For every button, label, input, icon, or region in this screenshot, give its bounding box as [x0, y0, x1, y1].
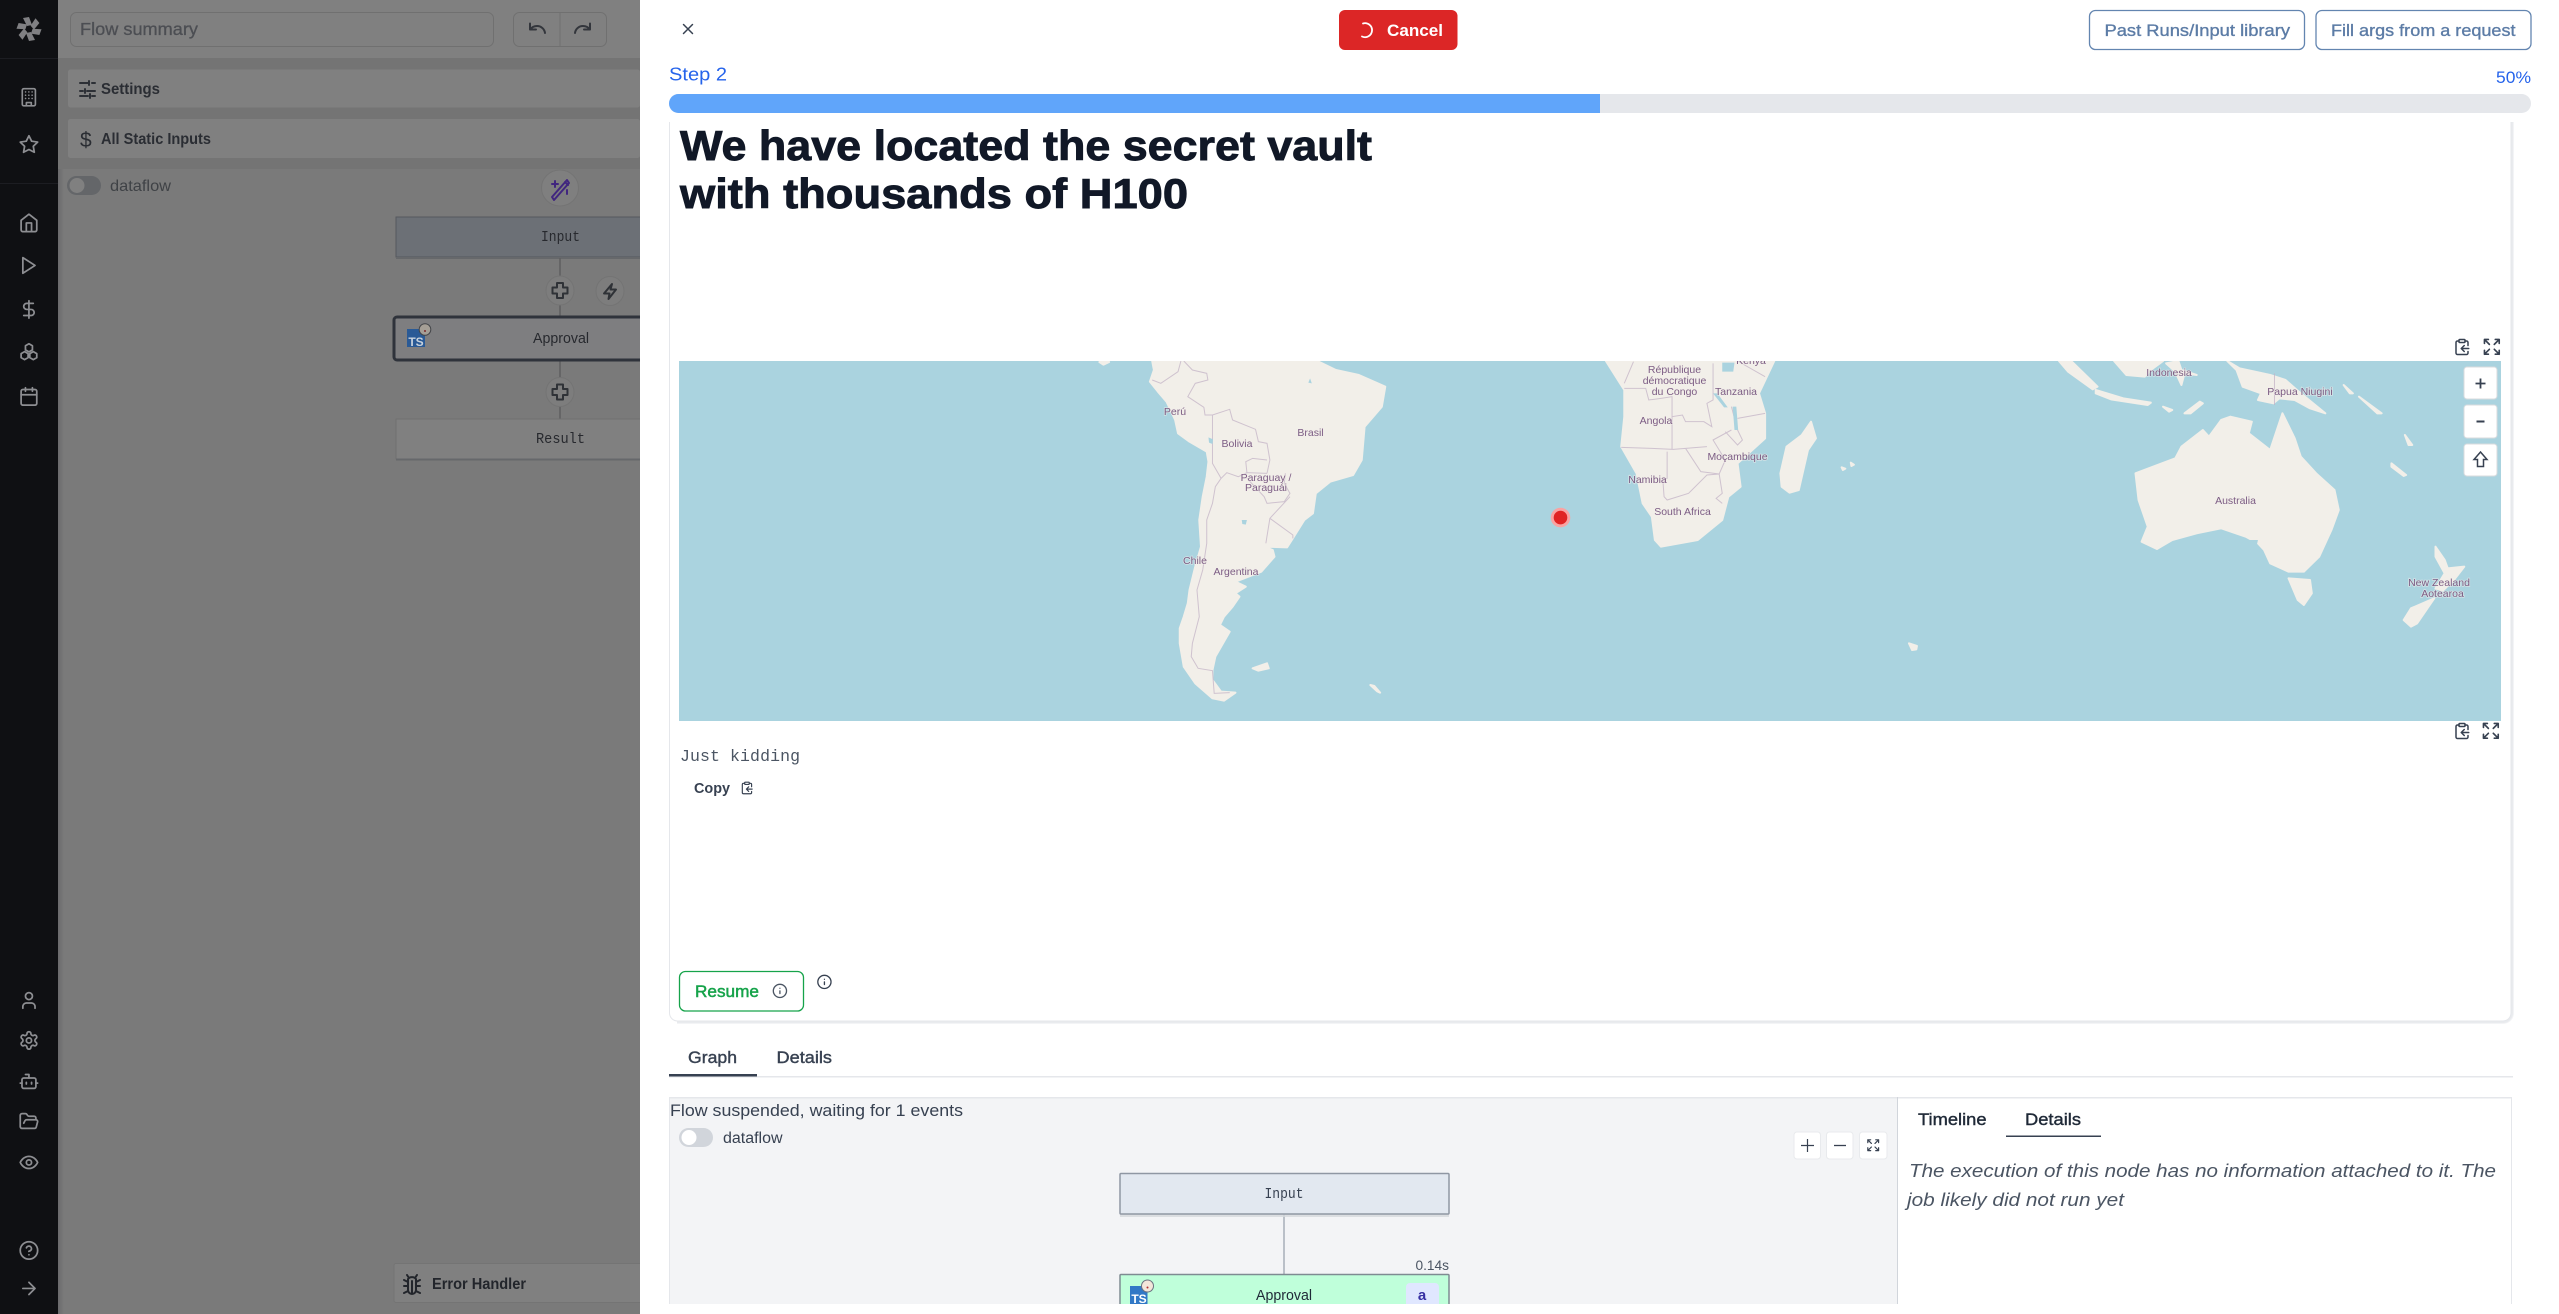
button: copy: Copy [694, 781, 730, 797]
map labels: Moçambique [1707, 451, 1768, 463]
map labels: Bolivia [1222, 438, 1253, 450]
icon: star [20, 136, 38, 152]
icon: logo [16, 17, 42, 41]
tabs: timeline and details: Timeline [1918, 1110, 1986, 1129]
map labels: Indonesia [2146, 367, 2192, 379]
icon: dollar [24, 301, 34, 318]
map labels: République [1648, 364, 1701, 376]
icon: calendar [21, 388, 37, 405]
map labels: du Congo [1652, 386, 1697, 398]
icon: copy map bottom [2456, 724, 2469, 738]
progress bar [669, 94, 2531, 113]
button: fill args: Fill args from a request [2331, 21, 2516, 40]
icon: folder [20, 1114, 38, 1128]
map labels: South Africa [1654, 506, 1711, 518]
icon: bot [20, 1074, 38, 1088]
input: flow summary: Flow summary [80, 19, 198, 39]
button: cancel: Cancel [1387, 21, 1443, 40]
row: error handler [403, 1274, 526, 1295]
input: flow summary [70, 12, 494, 46]
node: input [1120, 1174, 1449, 1217]
button: cancel [1339, 10, 1458, 50]
tabs: graph and details: Graph [688, 1048, 737, 1067]
button: past runs [2090, 10, 2304, 50]
icon: boxes [21, 344, 37, 360]
node: approval [1119, 1274, 1450, 1304]
map labels: Argentina [1214, 566, 1259, 578]
node: approval: TS [1131, 1292, 1147, 1306]
node: approval: Approval [533, 330, 589, 347]
map labels [1164, 355, 2470, 600]
icon: play [23, 258, 35, 273]
row: settings: Settings [101, 81, 160, 98]
label: step: Step 2 [669, 64, 727, 84]
map labels: Paraguái [1245, 482, 1287, 494]
node: approval: Approval [1256, 1287, 1312, 1304]
map [679, 355, 2501, 721]
node: approval: a [1418, 1287, 1427, 1304]
icon: copy map top [2456, 340, 2469, 354]
map labels: Chile [1183, 555, 1207, 567]
top bar [58, 0, 640, 59]
icon: add step [552, 276, 568, 306]
row: settings [68, 69, 640, 108]
map labels: démocratique [1643, 375, 1706, 387]
map labels: Perú [1164, 406, 1186, 418]
row: all static inputs [68, 118, 640, 158]
button: past runs: Past Runs/Input library [2104, 21, 2291, 40]
map labels: Brasil [1297, 427, 1324, 439]
icon: expand map top [2484, 339, 2499, 354]
land: africa, islands, asia, oceania [1606, 361, 2464, 650]
map zoom controls [2464, 367, 2497, 476]
text: no information message [1904, 1160, 2496, 1210]
icon: settings gear [21, 1032, 37, 1049]
text: no information message: The execution of this node has no information attached to it. The [1909, 1160, 2496, 1181]
icon: collapse arrow [23, 1282, 35, 1295]
button: resume: Resume [695, 982, 759, 1001]
duration label: 0.14s [1416, 1257, 1449, 1273]
text: just kidding: Just kidding [680, 747, 800, 766]
panel: sidebar [0, 0, 58, 1314]
status text: Flow suspended, waiting for 1 events [670, 1101, 963, 1120]
row: error handler: Error Handler [432, 1276, 526, 1293]
icon: info [818, 975, 831, 989]
icon: add step below approval [552, 377, 568, 407]
row: all static inputs: All Static Inputs [101, 131, 211, 148]
map labels: Paraguay / [1241, 472, 1291, 484]
text: no information message: job likely did not run yet [1904, 1189, 2125, 1210]
land: south america [1099, 361, 1385, 701]
dataflow toggle [679, 1128, 783, 1147]
icon: help [20, 1242, 38, 1259]
label: progress percent: 50% [2496, 69, 2531, 87]
icon: home [21, 214, 37, 232]
tabs: graph and details [669, 1048, 2513, 1078]
map marker [1551, 508, 1570, 527]
map labels: New Zealand [2408, 577, 2470, 589]
node: approval [394, 317, 650, 360]
panel: test flow drawer [640, 0, 2559, 1314]
dataflow toggle: dataflow [110, 178, 171, 195]
map labels: Tanzania [1715, 386, 1757, 398]
panel: dimmed flow editor background [58, 0, 650, 1314]
button: resume [680, 972, 804, 1011]
icon: close [684, 24, 692, 34]
dataflow toggle [67, 176, 171, 195]
panel: node details [1898, 1097, 2512, 1304]
map labels: Kenya [1736, 355, 1766, 367]
icon: magic wand button [551, 179, 570, 201]
icon: building [22, 89, 35, 106]
map labels: Papua Niugini [2267, 386, 2333, 398]
connector line [1283, 1214, 1285, 1274]
panel: step card [670, 122, 2513, 1023]
icon: expand map bottom [2483, 723, 2498, 738]
dataflow toggle: dataflow [723, 1130, 783, 1147]
icon: user [23, 993, 35, 1008]
map labels: Australia [2215, 495, 2256, 507]
icon: eye [20, 1156, 38, 1169]
node: approval: TS [408, 335, 424, 349]
map labels: Angola [1640, 415, 1673, 427]
node: result [396, 419, 646, 460]
node: input: Input [1264, 1187, 1304, 1203]
map labels: Namibia [1628, 474, 1667, 486]
heading: We have located the secret vault [680, 122, 1372, 169]
tabs: timeline and details: Details [2025, 1110, 2081, 1129]
tabs: timeline and details [1918, 1110, 2101, 1137]
node: result: Result [536, 432, 585, 448]
row: all static inputs: $ [80, 129, 92, 152]
button: copy [694, 781, 752, 797]
icon: lightning trigger [603, 283, 617, 300]
panel: flow graph [669, 1097, 1898, 1314]
map labels: Aotearoa [2421, 588, 2464, 600]
node: input: Input [541, 230, 580, 246]
button: fill args [2316, 10, 2531, 50]
heading [679, 122, 1372, 217]
node: input [396, 217, 646, 259]
undo and redo buttons [514, 12, 606, 47]
graph zoom controls [1794, 1132, 1887, 1159]
tabs: graph and details: Details [776, 1048, 832, 1067]
heading: with thousands of H100 [679, 170, 1188, 217]
